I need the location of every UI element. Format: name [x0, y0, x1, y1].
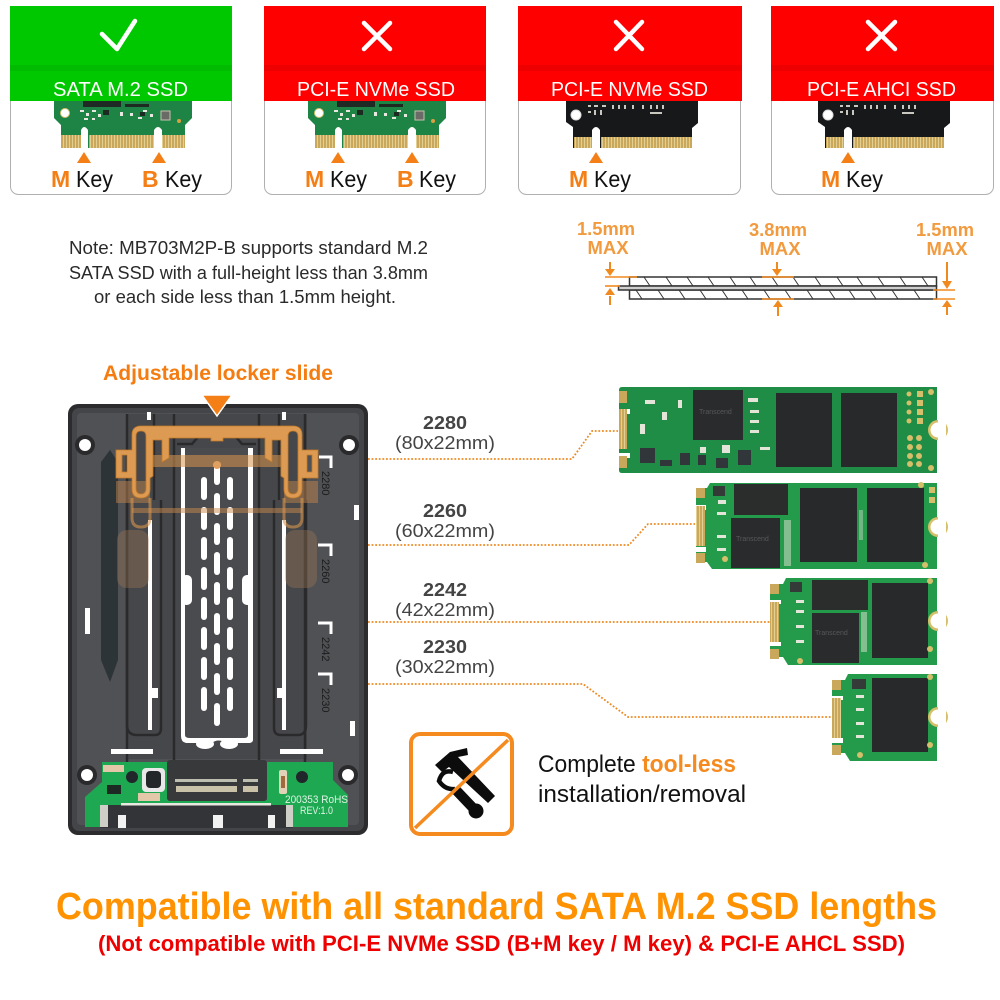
M key marker — [821, 152, 883, 192]
size label: 2230: 2230 — [423, 637, 467, 657]
left loop and ear — [116, 426, 318, 498]
icon: check mark — [102, 21, 135, 49]
icon: cross — [364, 23, 390, 49]
PCB marking: 200353 RoHS — [285, 794, 348, 806]
M key marker: Key — [330, 166, 367, 192]
heading: adjustable locker slide: Adjustable locker slide — [103, 362, 333, 385]
M key marker: M — [305, 166, 324, 192]
size label: 2242: (42x22mm) — [395, 600, 495, 620]
header label: PCI-E NVMe SSD — [551, 79, 708, 101]
bottom PCB: REV:1.0 — [300, 805, 333, 817]
SSD: 2260: Transcend — [736, 536, 769, 543]
SSD connector: NVMe B+M key — [308, 101, 446, 148]
SSD: 2230 — [832, 674, 948, 761]
SATA connector — [100, 805, 293, 828]
M key marker: Key — [846, 166, 883, 192]
note text: SATA SSD with a full-height less than 3.8mm — [69, 263, 428, 283]
note text — [69, 238, 428, 307]
SSD: 2280: Transcend — [699, 409, 732, 416]
B key marker — [142, 152, 202, 192]
M key marker: M — [569, 166, 588, 192]
white side slots — [85, 412, 359, 754]
B key marker — [397, 152, 456, 192]
header label: PCI-E AHCI SSD — [807, 79, 956, 101]
label: 1.5mm right — [916, 220, 974, 315]
note text: or each side less than 1.5mm height. — [94, 287, 396, 307]
M key marker: M — [821, 166, 840, 192]
icon: cross — [616, 22, 642, 49]
SSD: 2242: Transcend — [815, 630, 848, 637]
SSD connector: AHCI M key — [818, 101, 950, 148]
label: 1.5mm right: MAX — [926, 239, 968, 259]
callout: tool-less installation: installation/removal — [538, 781, 746, 808]
label: 1.5mm left: MAX — [588, 238, 628, 258]
length arrow marking — [101, 450, 118, 682]
dotted leader lines — [368, 431, 832, 717]
size label: 2280: 2280 — [423, 413, 467, 433]
M key marker — [569, 152, 631, 192]
panel: PCI-E AHCI SSD not supported — [771, 6, 994, 194]
enclosure tray — [68, 395, 368, 835]
size label: 2230 — [395, 637, 495, 677]
length markers printed on tray: 2260 — [319, 559, 331, 583]
callout: tool-less installation: Complete tool-less — [538, 751, 736, 778]
components — [142, 768, 165, 792]
panel: PCI-E NVMe SSD B+M not supported — [264, 6, 486, 194]
SSD cross-section — [618, 277, 936, 299]
orange locker slide ghost — [116, 481, 318, 588]
SSD connector: NVMe M key — [566, 101, 698, 148]
center plate with slots — [181, 448, 253, 749]
orange locker slide — [116, 426, 318, 498]
header band: green — [10, 6, 232, 101]
header label: SATA M.2 SSD — [53, 79, 188, 101]
header band: red — [518, 6, 742, 101]
rails — [127, 414, 306, 770]
B key marker: Key — [419, 166, 456, 192]
size label: 2260: (60x22mm) — [395, 521, 495, 541]
label: 3.8mm center: 3.8mm — [749, 220, 807, 240]
length markers printed on tray: 2280 — [319, 471, 331, 495]
length markers printed on tray: 2242 — [319, 637, 331, 661]
size label: 2242 — [395, 580, 495, 620]
icon: no tools required — [411, 734, 512, 834]
title: compatibility headline: Compatible with all standard SATA M.2 SSD lengths — [56, 886, 937, 928]
header band: red — [264, 6, 486, 101]
icon: cross — [868, 22, 895, 49]
thickness diagram — [577, 219, 974, 316]
SSD: 2280 — [619, 387, 948, 473]
label: 1.5mm left: 1.5mm — [577, 219, 635, 239]
SSD connector: SATA B+M key — [54, 101, 192, 148]
slash — [415, 740, 508, 828]
label: 1.5mm left — [577, 219, 635, 305]
board connector — [167, 760, 267, 801]
M key marker: Key — [594, 166, 631, 192]
M key marker: Key — [76, 166, 113, 192]
size label: 2260: 2260 — [423, 501, 467, 521]
hammer and wrench — [435, 748, 495, 818]
size label: 2280: (80x22mm) — [395, 433, 495, 453]
label: 3.8mm center — [749, 220, 807, 316]
B key marker: B — [142, 166, 159, 192]
icon: orange pointer triangle — [202, 395, 232, 416]
bottom PCB — [85, 760, 348, 828]
SSD: 2242 — [770, 578, 948, 665]
length markers printed on tray — [318, 457, 331, 712]
M key marker — [305, 152, 367, 192]
callout: tool-less installation — [538, 751, 746, 808]
SSD: 2260 — [696, 482, 948, 569]
B key marker: Key — [165, 166, 202, 192]
subtitle: incompatibility warning: (Not compatible with PCI-E NVMe SSD (B+M key / M key) & PCI-E AHCL SSD) — [98, 931, 905, 956]
size label: 2242: 2242 — [423, 580, 467, 600]
B key marker: B — [397, 166, 414, 192]
length markers printed on tray: 2230 — [319, 688, 331, 712]
note text: Note: MB703M2P-B supports standard M.2 — [69, 238, 428, 258]
label: 3.8mm center: MAX — [760, 239, 800, 259]
panel: SATA M.2 SSD supported — [10, 6, 232, 194]
size label: 2260 — [395, 501, 495, 541]
header label: PCI-E NVMe SSD — [297, 79, 455, 101]
screw holes — [75, 435, 359, 785]
M key marker — [51, 152, 113, 192]
size label: 2280 — [395, 413, 495, 453]
tray body — [68, 404, 368, 835]
M key marker: M — [51, 166, 70, 192]
panel: PCI-E NVMe SSD M not supported — [518, 6, 742, 194]
size label: 2230: (30x22mm) — [395, 657, 495, 677]
label: 1.5mm right: 1.5mm — [916, 220, 974, 240]
header band: red — [771, 6, 994, 101]
